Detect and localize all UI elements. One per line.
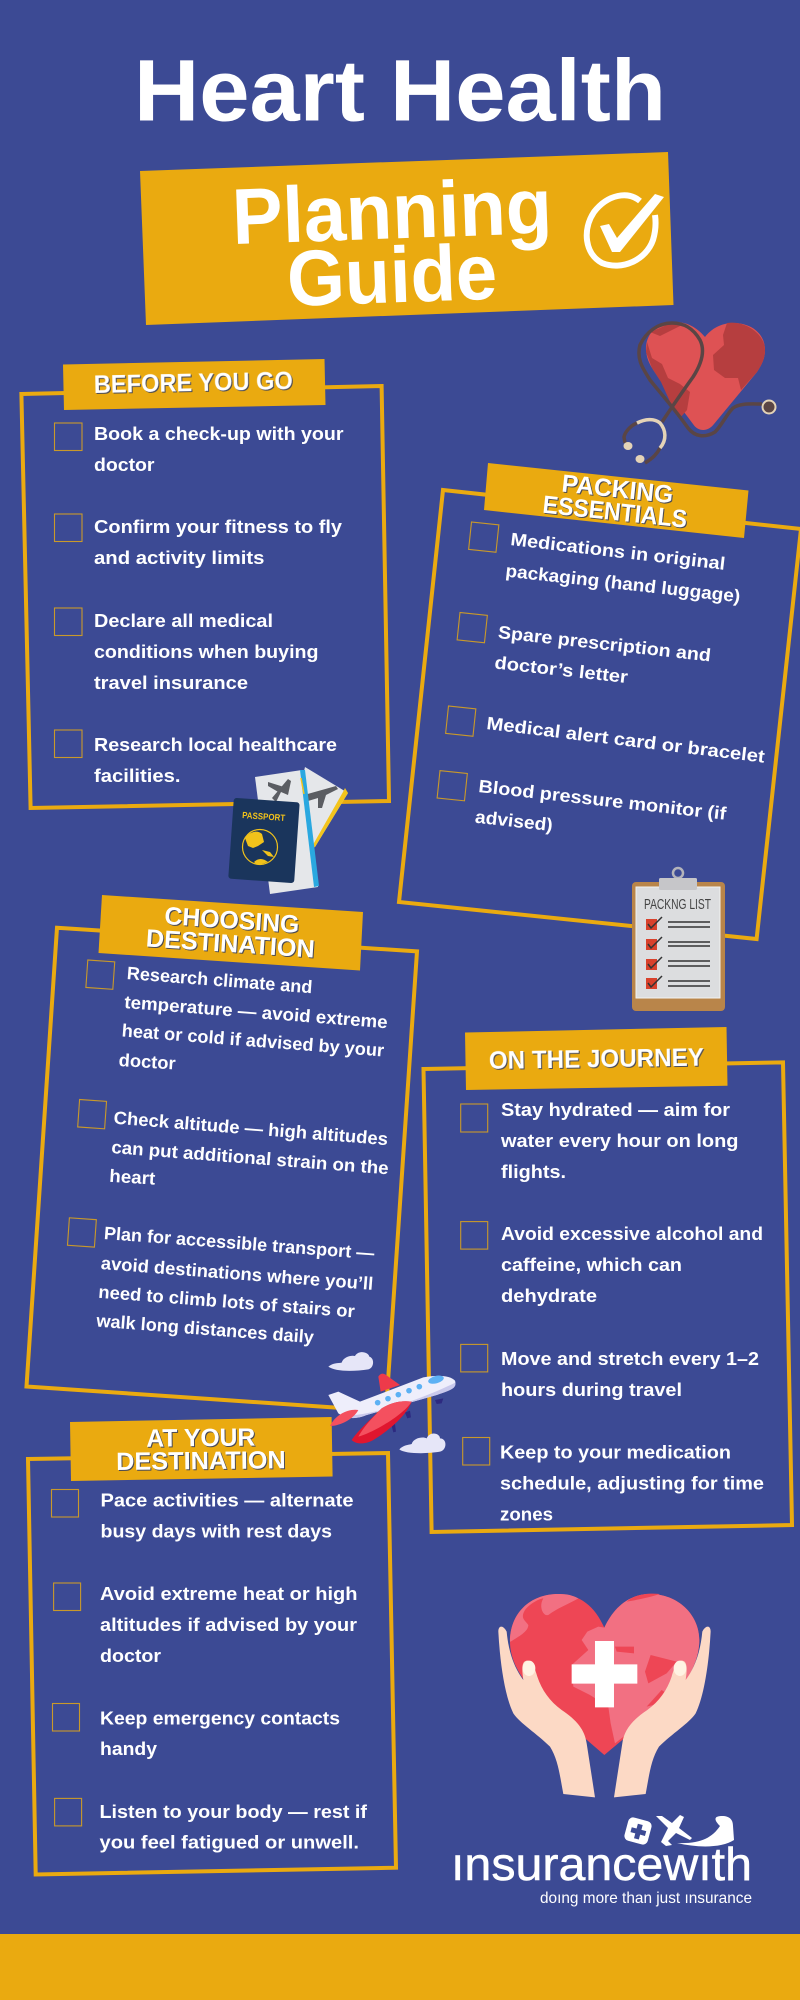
checklist item	[463, 1438, 764, 1524]
checklist item: Confirm your fitness to fly	[94, 517, 342, 537]
checklist item: packaging (hand luggage)	[505, 561, 741, 606]
checklist item: Plan for accessible transport —	[103, 1223, 375, 1263]
logo: insurancewith	[451, 1815, 752, 1907]
checklist item	[78, 1100, 389, 1189]
checklist item: temperature — avoid extreme	[124, 992, 388, 1032]
checklist item: handy	[100, 1739, 157, 1759]
checklist item: Medical alert card or bracelet	[486, 713, 766, 767]
checklist item: can put additional strain on the	[111, 1137, 389, 1178]
footer bar	[0, 1934, 800, 2000]
heading label: DESTINATION	[145, 924, 316, 964]
checklist item: Book a check-up with your	[94, 424, 344, 444]
panel: before you go	[21, 359, 389, 808]
checklist item	[54, 1583, 357, 1666]
checklist item: flights.	[501, 1162, 566, 1182]
checklist item: caffeine, which can	[501, 1255, 682, 1275]
checklist item: Move and stretch every 1–2	[501, 1349, 759, 1369]
heading label: DESTINATION	[116, 1446, 286, 1476]
checklist item: travel insurance	[94, 673, 248, 693]
checklist item: Spare prescription and	[497, 622, 712, 665]
heading label	[465, 1027, 728, 1090]
checklist item	[446, 706, 766, 767]
checklist item	[461, 1222, 763, 1306]
icon: heart globe with stethoscope	[624, 322, 776, 463]
checklist item: Research climate and	[126, 963, 313, 997]
panel: at your destination	[28, 1417, 396, 1874]
checklist item: schedule, adjusting for time	[500, 1474, 764, 1494]
checklist item: hours during travel	[501, 1380, 682, 1400]
heading label	[98, 895, 363, 970]
checklist item	[55, 1798, 368, 1852]
heading label	[70, 1417, 333, 1481]
panel: on the journey	[424, 1027, 792, 1532]
checklist item: doctor	[118, 1050, 176, 1073]
banner heading	[230, 161, 553, 323]
checklist item: Medications in original	[510, 529, 726, 574]
title: Heart Health	[134, 42, 666, 140]
cloud	[328, 1352, 373, 1371]
icon: passport and boarding passes: PASSPORT	[242, 810, 286, 823]
icon: packing list clipboard: PACKNG LIST	[644, 896, 711, 913]
checklist item: zones	[500, 1504, 553, 1524]
checklist item: Keep to your medication	[500, 1442, 731, 1462]
logo: insurancewith: ınsurancewıth	[451, 1838, 752, 1890]
checklist item: Declare all medical	[94, 611, 273, 631]
icon: passport and boarding passes	[228, 767, 348, 894]
panel: packing essentials	[399, 463, 800, 939]
checklist item	[54, 514, 342, 568]
heading label: PACKING	[560, 470, 675, 509]
logo: insurancewith: doıng more than just ınsurance	[540, 1890, 752, 1907]
checklist item: doctor’s letter	[494, 652, 629, 687]
heading label: CHOOSING	[164, 902, 300, 939]
checklist item: facilities.	[94, 766, 180, 786]
checklist item	[52, 1704, 340, 1759]
banner heading: Guide	[285, 227, 498, 323]
checklist item: Avoid excessive alcohol and	[501, 1224, 763, 1244]
checklist item: walk long distances daily	[95, 1310, 315, 1347]
checklist item: Keep emergency contacts	[100, 1708, 340, 1728]
icon: hands holding heart globe with cross	[498, 1594, 711, 1797]
checklist item: doctor	[100, 1646, 161, 1666]
checklist item: doctor	[94, 455, 154, 475]
checklist item	[54, 730, 337, 786]
heading label: ESSENTIALS	[541, 491, 689, 534]
checklist item	[437, 771, 728, 835]
checklist item	[461, 1100, 738, 1182]
airplane	[328, 1374, 455, 1443]
banner heading: Planning	[230, 161, 553, 261]
checklist item: Blood pressure monitor (if	[478, 776, 728, 824]
checklist item: you feel fatigued or unwell.	[100, 1832, 359, 1852]
banner: planning guide	[140, 152, 674, 325]
checklist item	[469, 522, 741, 606]
icon: packing list clipboard	[632, 868, 725, 1011]
checklist item: conditions when buying	[94, 642, 318, 662]
checklist item: Pace activities — alternate	[100, 1490, 354, 1510]
heading label: AT YOUR	[146, 1424, 255, 1453]
checklist item: Stay hydrated — aim for	[501, 1100, 730, 1120]
checklist item: and activity limits	[94, 548, 264, 568]
checklist item	[67, 1218, 375, 1347]
checklist item: altitudes if advised by your	[100, 1615, 357, 1635]
checklist item	[461, 1344, 759, 1400]
checklist item: avoid destinations where you’ll	[100, 1253, 374, 1294]
icon: check mark in circle	[587, 194, 664, 266]
checklist item: dehydrate	[501, 1286, 597, 1306]
checklist item: heart	[109, 1166, 156, 1189]
checklist item: water every hour on long	[500, 1131, 738, 1151]
heading label: ON THE JOURNEY	[489, 1044, 704, 1075]
checklist item: advised)	[474, 807, 554, 835]
heading label: BEFORE YOU GO	[94, 367, 293, 399]
heading label	[484, 463, 748, 538]
checklist item: need to climb lots of stairs or	[98, 1282, 355, 1321]
checklist item: Avoid extreme heat or high	[100, 1584, 358, 1604]
logo icons	[623, 1815, 734, 1846]
checklist item: Research local healthcare	[94, 735, 337, 755]
checklist item: Check altitude — high altitudes	[113, 1108, 389, 1149]
panel: choosing destination	[26, 895, 417, 1411]
checklist item	[86, 960, 388, 1073]
checklist item	[457, 612, 712, 687]
cloud	[399, 1434, 445, 1453]
checklist item: busy days with rest days	[100, 1521, 332, 1541]
checklist item	[54, 423, 344, 475]
heading label	[63, 359, 326, 410]
checklist item	[52, 1490, 354, 1541]
checklist item	[54, 608, 318, 693]
checklist item: heat or cold if advised by your	[121, 1020, 385, 1061]
checklist item: Listen to your body — rest if	[100, 1802, 368, 1822]
icon: airplane with clouds	[328, 1352, 455, 1453]
